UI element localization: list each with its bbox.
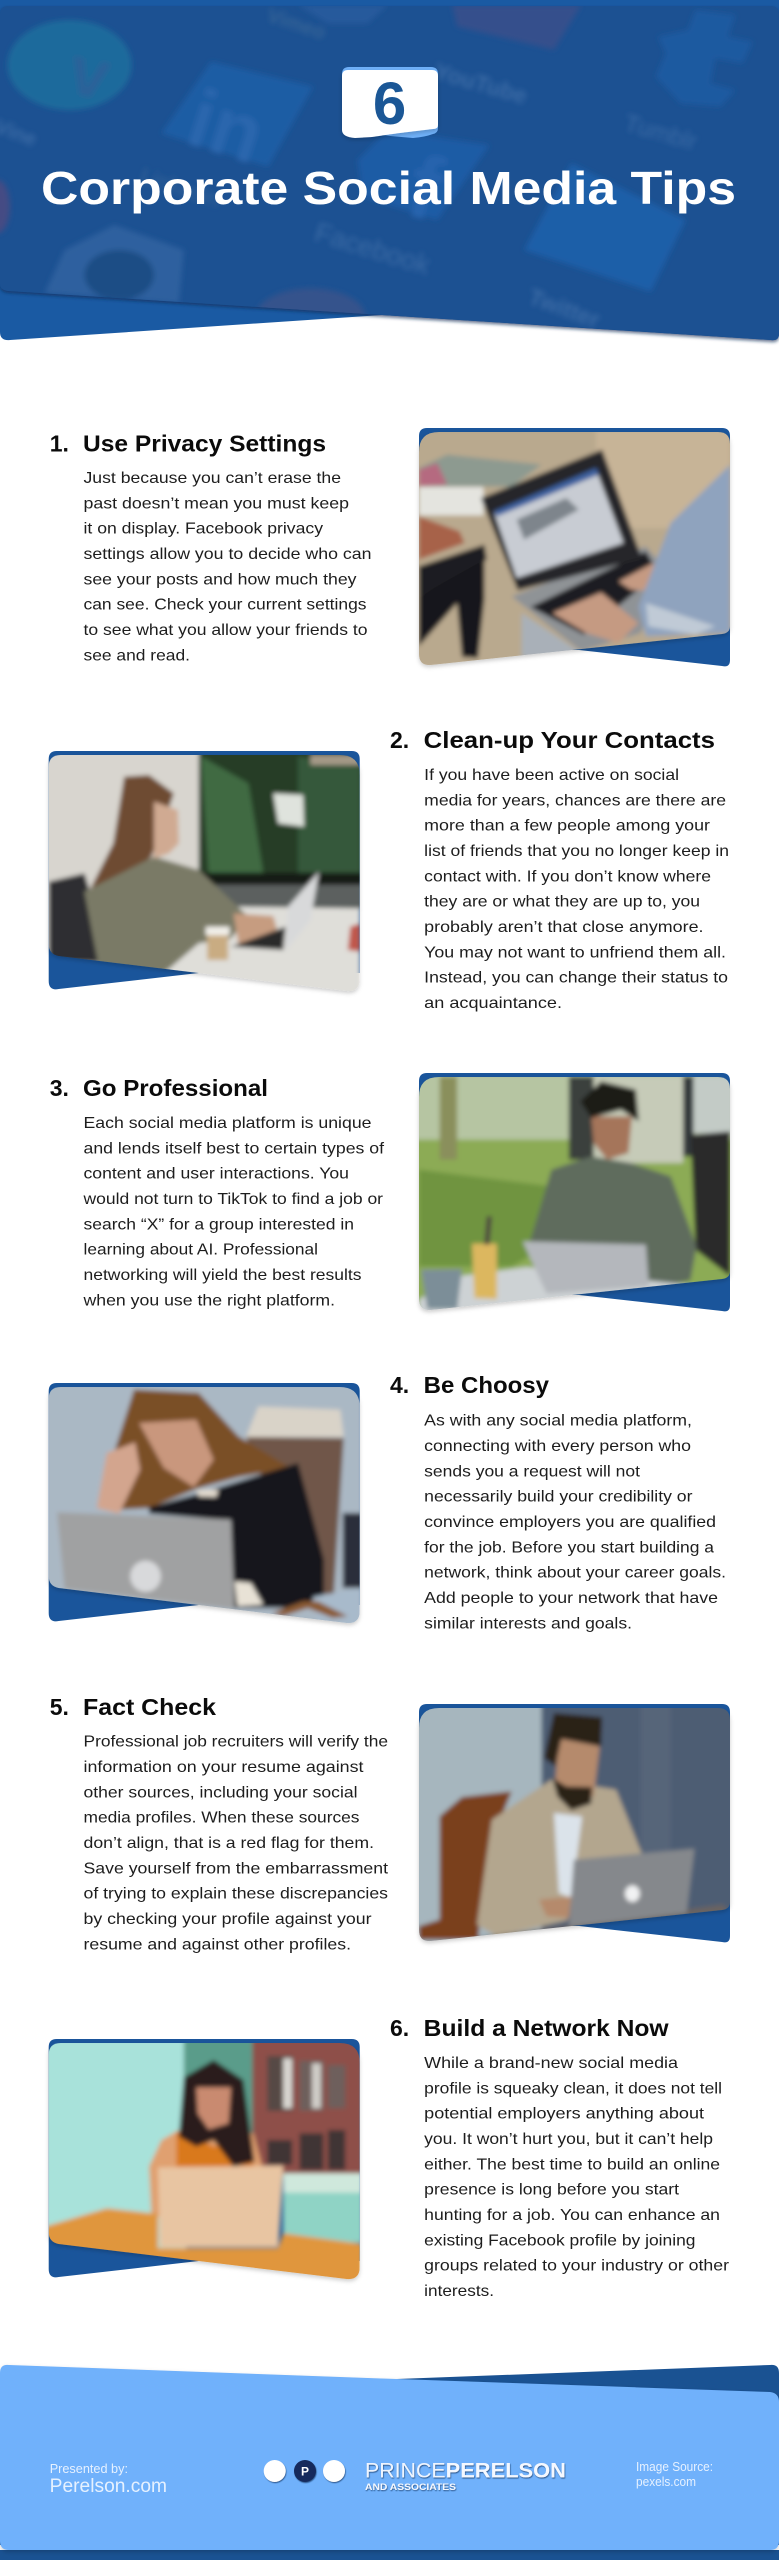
- tip 5 body: information on your resume against: [84, 1759, 364, 1776]
- footer back panel: [0, 2365, 779, 2560]
- tip 2 body: list of friends that you no longer keep in: [424, 843, 729, 860]
- tip 5 body: by checking your profile against your: [84, 1911, 372, 1928]
- tip 4 body: necessarily build your credibility or: [424, 1489, 692, 1506]
- tip 3 body: and lends itself best to certain types of: [84, 1140, 385, 1157]
- presented by: [50, 2461, 167, 2497]
- tip 1 body: it on display. Facebook privacy: [84, 521, 323, 538]
- tip 4 body: As with any social media platform,: [424, 1413, 692, 1430]
- tip 5 heading: 5.: [50, 1694, 69, 1720]
- tip 1 body: to see what you allow your friends to: [84, 622, 368, 639]
- logo wordmark: PRINCE: [365, 2460, 446, 2483]
- tip 4 body: connecting with every person who: [424, 1438, 691, 1455]
- tip 1 heading: Use Privacy Settings: [83, 431, 326, 457]
- tip 6 photo: smiling woman at laptop: [45, 2039, 363, 2287]
- tip 3 text: [50, 1075, 385, 1309]
- tip 3 body: [82, 1115, 385, 1309]
- number badge: 6: [373, 70, 406, 137]
- presented by: Perelson.com: [50, 2476, 167, 2497]
- tip 3 photo: man at outdoor table with laptop: [412, 1073, 735, 1320]
- tip 2 body: Instead, you can change their status to: [424, 970, 728, 987]
- blurred social media icons background: v: [63, 30, 117, 115]
- tip 5 photo: bearded man with laptop in leather chair: [412, 1703, 735, 1946]
- blurred social media icons background: in: [177, 73, 275, 182]
- blurred social media icons background: Tumblr: [621, 110, 700, 156]
- tip 2 text: [390, 727, 729, 1012]
- tip 3 body: networking will yield the best results: [84, 1267, 362, 1284]
- tip 5 body: Save yourself from the embarrassment: [84, 1860, 389, 1877]
- logo: Prince Perelson and Associates: [264, 2460, 566, 2493]
- blurred social media icons background: [0, 5, 753, 345]
- tip 6 body: potential employers anything about: [424, 2106, 705, 2123]
- tip 3 heading: 3.: [50, 1075, 69, 1101]
- tip 4 body: for the job. Before you start building a: [424, 1539, 714, 1556]
- tip 2 body: media for years, chances are there are: [424, 792, 726, 809]
- tip 2 body: an acquaintance.: [424, 995, 562, 1012]
- tip 2 body: contact with. If you don’t know where: [424, 868, 711, 885]
- header front panel: [0, 6, 779, 340]
- tip 2 body: more than a few people among your: [424, 818, 710, 835]
- header back panel: [0, 0, 779, 340]
- tip 5 body: Professional job recruiters will verify the: [84, 1734, 388, 1751]
- title: Corporate Social Media Tips: [41, 162, 736, 214]
- tip 4 text: [390, 1372, 726, 1632]
- header banner: [0, 0, 779, 345]
- tip 2 heading: 2.: [390, 727, 409, 753]
- tip 6 body: groups related to your industry or other: [424, 2258, 729, 2275]
- tip 1 photo: laptop with Facebook page: [412, 428, 735, 668]
- image source: Image Source:: [636, 2460, 713, 2474]
- tip 3 body: search “X” for a group interested in: [84, 1216, 354, 1233]
- tip 3 body: content and user interactions. You: [84, 1166, 349, 1183]
- tip 5 body: media profiles. When these sources: [84, 1810, 360, 1827]
- tip 6 body: existing Facebook profile by joining: [424, 2232, 696, 2249]
- number badge: [342, 67, 438, 138]
- tip 6 body: either. The best time to build an online: [424, 2156, 720, 2173]
- logo wordmark: AND ASSOCIATES: [365, 2482, 456, 2493]
- tip 2 body: If you have been active on social: [424, 767, 679, 784]
- tip 5 text: [50, 1694, 389, 1953]
- tip 3 body: Each social media platform is unique: [84, 1115, 372, 1132]
- tip 1 text: [50, 431, 371, 664]
- blurred social media icons background: Vimeo: [264, 5, 328, 44]
- blurred social media icons background: Twitter: [525, 283, 603, 333]
- footer front panel: [0, 2365, 779, 2550]
- tip 4 body: convince employers you are qualified: [424, 1514, 716, 1531]
- tip 6 body: [424, 2055, 729, 2300]
- tip 2 body: probably aren’t that close anymore.: [424, 919, 704, 936]
- tip 2 body: You may not want to unfriend them all.: [424, 944, 726, 961]
- tip 6 heading: 6.: [390, 2015, 409, 2041]
- tip 6 body: presence is long before you start: [424, 2182, 680, 2199]
- tip 4 body: sends you a request will not: [424, 1463, 641, 1480]
- tip 6 body: profile is squeaky clean, it does not tell: [424, 2080, 722, 2097]
- tip 1 body: [84, 470, 372, 664]
- tip 6 text: [390, 2015, 729, 2300]
- tip 6 body: you. It won’t hurt you, but it can’t help: [424, 2131, 713, 2148]
- blurred social media icons background: YouTube: [432, 58, 530, 109]
- tip 6 body: hunting for a job. You can enhance an: [424, 2207, 720, 2224]
- tip 5 body: don’t align, that is a red flag for them.: [84, 1835, 374, 1852]
- tip 1 body: see your posts and how much they: [84, 571, 357, 588]
- tip 1 heading: 1.: [50, 431, 69, 457]
- tip 6 body: While a brand-new social media: [424, 2055, 678, 2072]
- tip 4 body: network, think about your career goals.: [424, 1565, 726, 1582]
- tip 5 body: other sources, including your social: [84, 1784, 358, 1801]
- presented by: Presented by:: [50, 2461, 128, 2476]
- footer: [0, 2365, 779, 2560]
- tip 6 body: interests.: [424, 2283, 494, 2300]
- tip 5 body: [84, 1734, 389, 1953]
- tip 2 photo: woman at laptop beside plants: [45, 750, 363, 997]
- tip 3 body: learning about AI. Professional: [84, 1242, 318, 1259]
- blurred social media icons background: Facebook: [311, 217, 434, 281]
- logo circles: P: [301, 2464, 309, 2478]
- tip 1 body: Just because you can’t erase the: [84, 470, 341, 487]
- tip 5 heading: Fact Check: [83, 1694, 216, 1720]
- tip 2 body: they are or what they are up to, you: [424, 894, 700, 911]
- tip 4 photo: stressed woman at laptop: [45, 1383, 363, 1626]
- tip 5 body: resume and against other profiles.: [84, 1936, 351, 1953]
- image source: pexels.com: [636, 2475, 696, 2489]
- tip 1 body: see and read.: [84, 647, 190, 664]
- image source: [636, 2460, 713, 2489]
- tip 3 heading: Go Professional: [83, 1075, 268, 1101]
- tip 1 body: can see. Check your current settings: [84, 597, 367, 614]
- tip 3 body: would not turn to TikTok to find a job or: [82, 1191, 383, 1208]
- tip 4 heading: Be Choosy: [424, 1372, 549, 1398]
- tip 1 body: settings allow you to decide who can: [84, 546, 372, 563]
- tip 4 body: [424, 1413, 726, 1632]
- tip 6 heading: Build a Network Now: [424, 2015, 669, 2041]
- tip 4 body: similar interests and goals.: [424, 1615, 632, 1632]
- logo circles: [264, 2460, 345, 2482]
- tip 3 body: when you use the right platform.: [82, 1292, 335, 1309]
- logo wordmark: PERELSON: [446, 2460, 566, 2483]
- blurred social media icons background: f: [398, 136, 452, 241]
- tip 2 heading: Clean-up Your Contacts: [424, 727, 715, 753]
- logo wordmark: [365, 2460, 566, 2493]
- tip 2 body: [424, 767, 729, 1012]
- tip 5 body: of trying to explain these discrepancies: [84, 1886, 388, 1903]
- tip 4 body: Add people to your network that have: [424, 1590, 718, 1607]
- blurred social media icons background: Linkedin: [137, 163, 223, 212]
- tip 4 heading: 4.: [390, 1372, 409, 1398]
- tip 1 body: past doesn’t mean you must keep: [84, 495, 349, 512]
